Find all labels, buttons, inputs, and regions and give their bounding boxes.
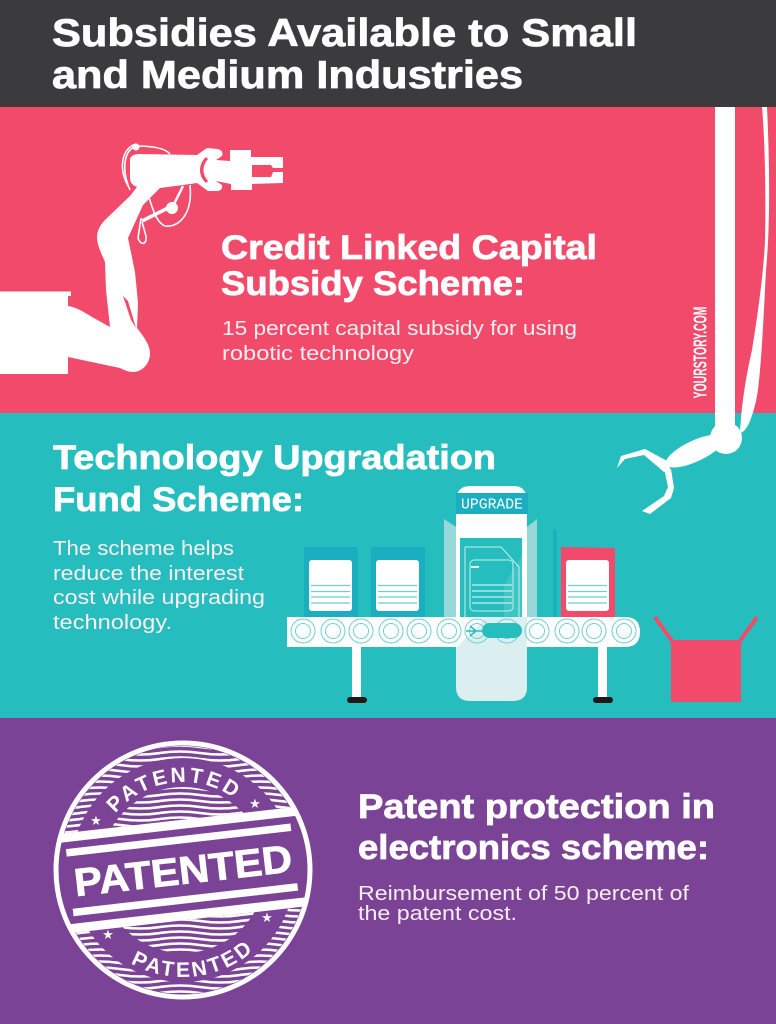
icon: patented stamp [54,740,312,1000]
heading: Subsidy Scheme: [221,265,525,303]
heading: Technology Upgradation [53,439,496,477]
stamp main word: PATENTED [72,838,294,905]
machine window with card outline [460,538,522,617]
illustration: upgrade conveyor machine [287,486,640,703]
card 1 [304,547,358,617]
heading: Patent protection in [358,788,715,826]
heading: Fund Scheme: [53,481,304,519]
body text: robotic technology [222,343,414,365]
panel: credit linked capital subsidy [0,107,776,413]
stamp top arc word: PATENTED [106,768,238,812]
credit: yourstory.com: YOURSTORY.COM [690,306,710,398]
body text: reduce the interest [53,563,245,585]
icon: robot arm [0,144,283,374]
card 3: red [561,547,615,617]
machine side doors [444,519,537,617]
stamp bottom arc word: PATENTED [132,942,250,977]
conveyor legs [347,647,613,703]
icon: hanging robot claw [617,107,769,514]
stamp stars: ★ [249,796,261,811]
title: and Medium Industries [52,54,523,97]
body text: The scheme helps [53,538,234,560]
machine top with upgrade sign [456,486,528,617]
stamp stars: ★ [102,927,114,942]
body text: the patent cost. [358,903,517,925]
panel: technology upgradation fund [0,413,776,718]
stamp stars: ★ [261,910,273,925]
body text: 15 percent capital subsidy for using [222,318,577,340]
body text: Reimbursement of 50 percent of [358,883,690,905]
side strip [553,530,556,617]
machine top with upgrade sign: UPGRADE [461,496,523,514]
title: Subsidies Available to Small [52,12,637,55]
machine lower body [456,640,527,701]
heading: Credit Linked Capital [221,229,597,267]
card 2 [371,547,425,617]
conveyor belt [287,617,640,647]
icon: open red box [655,617,757,702]
heading: electronics scheme: [358,829,709,867]
panel: patent protection [54,740,715,1000]
body text: cost while upgrading [53,587,265,609]
body text: technology. [53,612,172,634]
header banner [0,0,776,107]
stamp stars: ★ [90,813,102,828]
